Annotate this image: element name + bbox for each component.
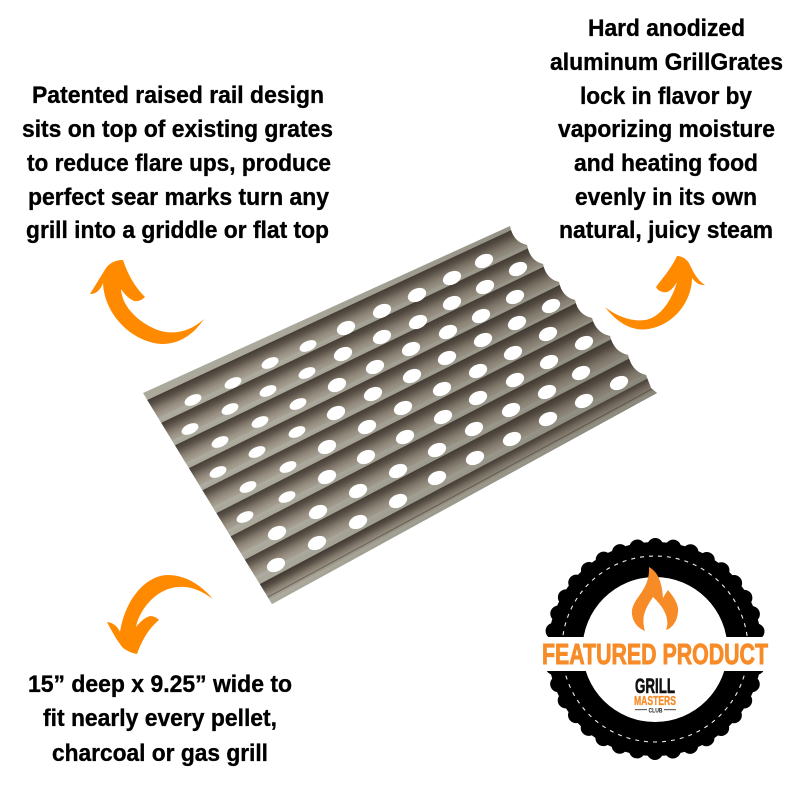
text: raised rail description: sits on top of existing grates xyxy=(22,116,333,143)
text: hard anodized aluminum description: and heating food xyxy=(574,150,758,177)
text: hard anodized aluminum description: Hard anodized xyxy=(588,15,745,42)
text: hard anodized aluminum description: aluminum GrillGrates xyxy=(550,49,783,76)
logo: grill masters club xyxy=(634,675,676,714)
text: raised rail description: grill into a griddle or flat top xyxy=(26,217,329,244)
logo: grill masters club: MASTERS xyxy=(634,694,676,708)
text: hard anodized aluminum description xyxy=(550,15,783,244)
badge: featured product xyxy=(530,542,780,756)
text: raised rail description: Patented raised rail design xyxy=(32,82,324,109)
grate holes xyxy=(180,251,630,575)
text: hard anodized aluminum description: natural, juicy steam xyxy=(559,217,773,244)
product image: grill grate panel xyxy=(143,226,657,604)
text: dimensions description: 15” deep x 9.25” wide to xyxy=(28,671,292,698)
badge flame icon xyxy=(632,567,678,631)
logo: grill masters club: CLUB xyxy=(648,708,663,714)
text: raised rail description: to reduce flare ups, produce xyxy=(27,150,331,177)
text: raised rail description xyxy=(22,82,333,244)
arrow: top left pointing up to text xyxy=(90,260,204,344)
text: hard anodized aluminum description: evenly in its own xyxy=(575,184,757,211)
text: hard anodized aluminum description: lock in flavor by xyxy=(580,83,753,110)
text: dimensions description: charcoal or gas grill xyxy=(52,740,268,767)
text: hard anodized aluminum description: vaporizing moisture xyxy=(558,116,775,143)
arrow: top right pointing up to text xyxy=(605,256,705,329)
text: dimensions description: fit nearly every pellet, xyxy=(43,705,277,732)
logo: grill masters club: GRILL xyxy=(635,675,675,698)
text: dimensions description xyxy=(28,671,292,767)
text: raised rail description: perfect sear marks turn any xyxy=(28,184,330,211)
arrow: bottom left pointing down to text xyxy=(107,575,213,654)
